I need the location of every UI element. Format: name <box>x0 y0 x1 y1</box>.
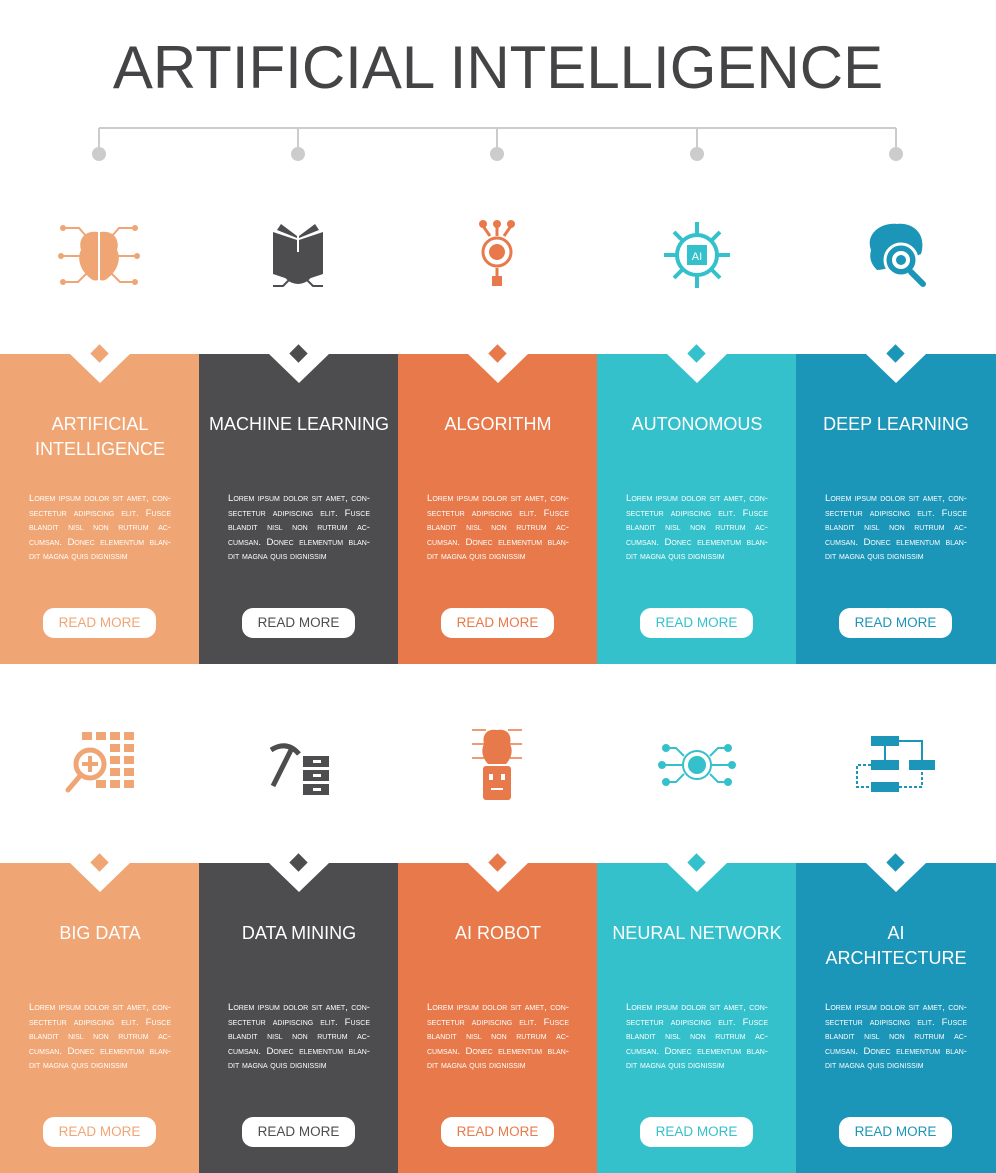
button: READ MORE <box>457 1124 538 1139</box>
text block: sectetur adipiscing elit. Fusce <box>29 508 171 519</box>
title: ARTIFICIAL INTELLIGENCE <box>113 34 883 101</box>
text block: Lorem ipsum dolor sit amet, con- <box>427 493 569 504</box>
button: READ MORE <box>656 1124 737 1139</box>
text block: cumsan. Donec elementum blan- <box>825 537 967 548</box>
text block <box>626 1002 768 1071</box>
text block: blandit nisl non rutrum ac- <box>29 522 171 533</box>
heading: ALGORITHM <box>444 414 552 434</box>
heading: NEURAL NETWORK <box>612 923 782 943</box>
heading: BIG DATA <box>59 923 141 943</box>
text block: cumsan. Donec elementum blan- <box>825 1046 967 1057</box>
icon: autonomous AI chip: AI <box>692 251 702 263</box>
text block: cumsan. Donec elementum blan- <box>29 537 171 548</box>
button <box>640 608 753 638</box>
icon: ai architecture <box>856 736 935 792</box>
panel: algorithm <box>398 354 598 664</box>
panel: data mining <box>199 863 399 1173</box>
text block <box>228 1002 370 1071</box>
text block: dit magna quis dignissim <box>427 551 526 562</box>
text block: cumsan. Donec elementum blan- <box>427 537 569 548</box>
text block: dit magna quis dignissim <box>29 1060 128 1071</box>
text block: Lorem ipsum dolor sit amet, con- <box>626 1002 768 1013</box>
button <box>640 1117 753 1147</box>
heading: AUTONOMOUS <box>632 414 762 434</box>
text block: blandit nisl non rutrum ac- <box>825 522 967 533</box>
panel: big data <box>0 863 200 1173</box>
button: READ MORE <box>59 615 140 630</box>
icon: algorithm gear <box>479 220 515 286</box>
text block <box>825 493 967 562</box>
text block: Lorem ipsum dolor sit amet, con- <box>427 1002 569 1013</box>
panel: artificial intelligence <box>0 354 200 664</box>
panel: ai robot <box>398 863 598 1173</box>
text block <box>626 493 768 562</box>
text block: sectetur adipiscing elit. Fusce <box>29 1017 171 1028</box>
button: READ MORE <box>855 615 936 630</box>
text block <box>427 493 569 562</box>
text block: dit magna quis dignissim <box>626 1060 725 1071</box>
text block: cumsan. Donec elementum blan- <box>228 537 370 548</box>
heading: ARCHITECTURE <box>825 948 966 968</box>
text block: cumsan. Donec elementum blan- <box>427 1046 569 1057</box>
icon: neural network <box>658 744 736 786</box>
icon: autonomous AI chip <box>664 222 730 288</box>
text block: cumsan. Donec elementum blan- <box>626 1046 768 1057</box>
heading <box>825 923 966 968</box>
text block: blandit nisl non rutrum ac- <box>427 522 569 533</box>
text block: sectetur adipiscing elit. Fusce <box>626 508 768 519</box>
button <box>242 608 355 638</box>
text block: dit magna quis dignissim <box>228 551 327 562</box>
text block: blandit nisl non rutrum ac- <box>626 1031 768 1042</box>
heading: DEEP LEARNING <box>823 414 969 434</box>
text block <box>228 493 370 562</box>
heading: ARTIFICIAL <box>52 414 148 434</box>
text block: blandit nisl non rutrum ac- <box>228 1031 370 1042</box>
button: READ MORE <box>855 1124 936 1139</box>
text block: Lorem ipsum dolor sit amet, con- <box>228 493 370 504</box>
icon: brain circuit <box>58 225 140 285</box>
text block: sectetur adipiscing elit. Fusce <box>427 1017 569 1028</box>
icon: book brain <box>273 224 323 287</box>
text block: cumsan. Donec elementum blan- <box>29 1046 171 1057</box>
button <box>43 1117 156 1147</box>
icon: deep learning brain magnifier <box>870 224 926 287</box>
text block: sectetur adipiscing elit. Fusce <box>825 508 967 519</box>
text block: Lorem ipsum dolor sit amet, con- <box>29 493 171 504</box>
text block: dit magna quis dignissim <box>626 551 725 562</box>
text block: sectetur adipiscing elit. Fusce <box>427 508 569 519</box>
text block: blandit nisl non rutrum ac- <box>626 522 768 533</box>
panel: ai architecture <box>796 863 996 1173</box>
text block: sectetur adipiscing elit. Fusce <box>228 508 370 519</box>
button <box>441 1117 554 1147</box>
text block: blandit nisl non rutrum ac- <box>825 1031 967 1042</box>
text block: Lorem ipsum dolor sit amet, con- <box>825 1002 967 1013</box>
button <box>242 1117 355 1147</box>
panel: neural network <box>597 863 797 1173</box>
panel: autonomous <box>597 354 797 664</box>
text block: blandit nisl non rutrum ac- <box>29 1031 171 1042</box>
text block: Lorem ipsum dolor sit amet, con- <box>825 493 967 504</box>
heading <box>35 414 165 459</box>
heading: AI ROBOT <box>455 923 541 943</box>
panel: machine learning <box>199 354 399 664</box>
panel: deep learning <box>796 354 996 664</box>
button: READ MORE <box>656 615 737 630</box>
timeline connector <box>92 127 903 161</box>
text block: blandit nisl non rutrum ac- <box>427 1031 569 1042</box>
text block: dit magna quis dignissim <box>825 551 924 562</box>
heading: MACHINE LEARNING <box>209 414 389 434</box>
heading: DATA MINING <box>242 923 356 943</box>
text block: Lorem ipsum dolor sit amet, con- <box>228 1002 370 1013</box>
text block <box>825 1002 967 1071</box>
button: READ MORE <box>59 1124 140 1139</box>
text block: dit magna quis dignissim <box>825 1060 924 1071</box>
button: READ MORE <box>258 615 339 630</box>
text block: dit magna quis dignissim <box>29 551 128 562</box>
text block: sectetur adipiscing elit. Fusce <box>825 1017 967 1028</box>
text block: sectetur adipiscing elit. Fusce <box>228 1017 370 1028</box>
icon: data mining <box>270 743 329 795</box>
button <box>441 608 554 638</box>
text block <box>427 1002 569 1071</box>
icon: big data <box>66 732 134 792</box>
icon: ai robot <box>472 729 522 800</box>
button <box>839 1117 952 1147</box>
text block: cumsan. Donec elementum blan- <box>228 1046 370 1057</box>
heading: INTELLIGENCE <box>35 439 165 459</box>
button <box>839 608 952 638</box>
text block: Lorem ipsum dolor sit amet, con- <box>29 1002 171 1013</box>
text block: sectetur adipiscing elit. Fusce <box>626 1017 768 1028</box>
heading: AI <box>887 923 904 943</box>
text block: blandit nisl non rutrum ac- <box>228 522 370 533</box>
text block: Lorem ipsum dolor sit amet, con- <box>626 493 768 504</box>
text block: dit magna quis dignissim <box>228 1060 327 1071</box>
text block: dit magna quis dignissim <box>427 1060 526 1071</box>
button <box>43 608 156 638</box>
text block <box>29 1002 171 1071</box>
button: READ MORE <box>457 615 538 630</box>
text block: cumsan. Donec elementum blan- <box>626 537 768 548</box>
text block <box>29 493 171 562</box>
button: READ MORE <box>258 1124 339 1139</box>
